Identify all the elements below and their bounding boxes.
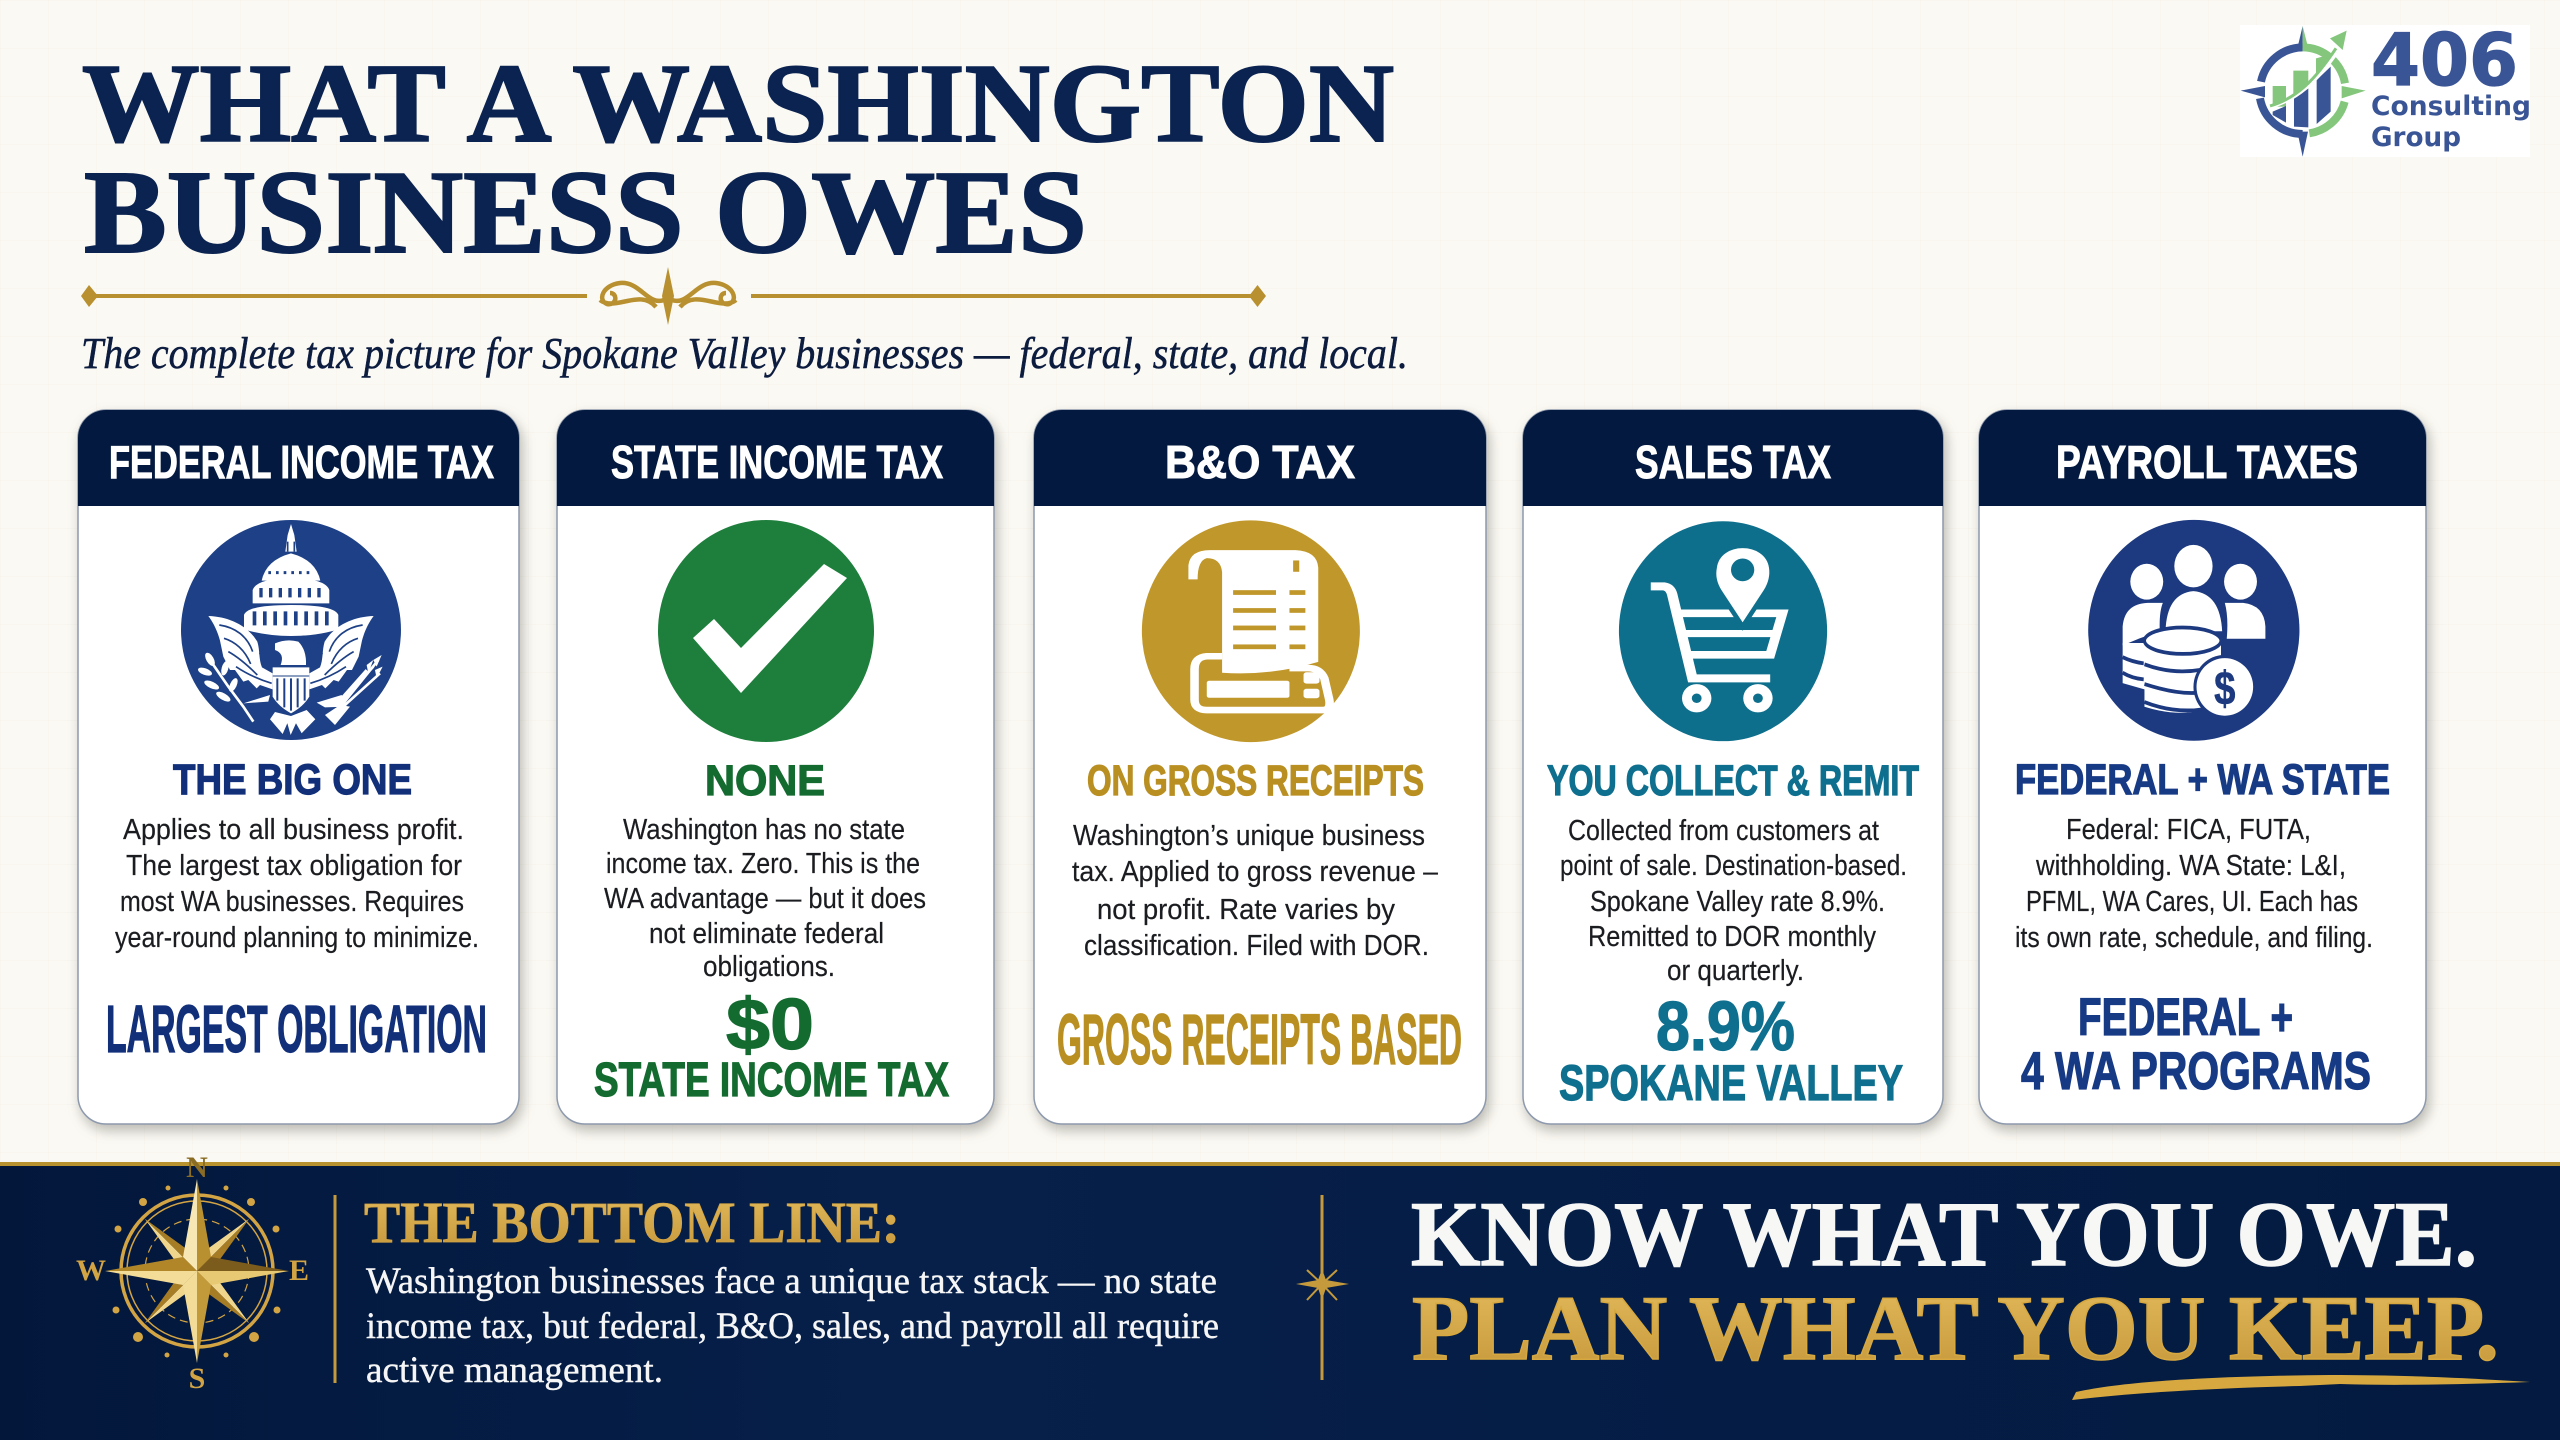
text block: bottom line summary	[366, 1261, 1219, 1391]
panel: sales tax	[1523, 410, 1943, 1124]
description: b&o	[1072, 820, 1439, 962]
description: state: not eliminate federal	[649, 918, 884, 950]
description: sales: Collected from customers at	[1568, 815, 1879, 847]
left wing	[208, 616, 273, 689]
logo: 406 Consulting Group: 406	[2371, 18, 2518, 102]
label: you collect & remit: YOU COLLECT & REMIT	[1547, 757, 1919, 805]
icon: capitol and eagle seal	[181, 520, 401, 740]
divider line left	[334, 1195, 336, 1383]
divider line with gold star	[1296, 1195, 1349, 1380]
icon: gold compass rose: N	[186, 1151, 208, 1184]
description: b&o: not profit. Rate varies by	[1097, 894, 1395, 926]
description: payroll: PFML, WA Cares, UI. Each has	[2026, 886, 2358, 918]
title: WHAT A WASHINGTON	[82, 42, 1394, 166]
description: sales: point of sale. Destination-based.	[1560, 850, 1907, 882]
description: state: income tax. Zero. This is the	[606, 848, 920, 880]
text block: bottom line summary: Washington businesses face a unique tax stack — no state	[366, 1261, 1217, 1302]
description: payroll: withholding. WA State: L&I,	[2035, 850, 2346, 882]
icon: receipt printer	[1142, 520, 1360, 742]
callout: largest obligation: LARGEST OBLIGATION	[106, 992, 487, 1067]
callout: $0 state income tax	[594, 985, 949, 1107]
title	[82, 42, 1394, 278]
description: payroll: its own rate, schedule, and filing.	[2015, 922, 2373, 954]
description: federal: The largest tax obligation for	[126, 850, 462, 882]
icon: gold compass rose	[76, 1151, 309, 1395]
gold brush underline	[2072, 1375, 2530, 1400]
callout: 8.9% spokane valley	[1559, 987, 1903, 1111]
subtitle: The complete tax picture for Spokane Valley businesses — federal, state, and local.	[81, 329, 1408, 378]
ornamental divider	[81, 267, 1266, 325]
description: federal	[115, 814, 479, 954]
title: BUSINESS OWES	[84, 146, 1087, 278]
slogan	[1411, 1183, 2499, 1379]
description: b&o: tax. Applied to gross revenue –	[1072, 856, 1439, 888]
text: GROSS RECEIPTS BASED	[1057, 1001, 1462, 1080]
callout: federal + 4 wa programs	[2021, 988, 2371, 1101]
description: federal: most WA businesses. Requires	[120, 886, 464, 918]
description: federal: Applies to all business profit.	[123, 814, 464, 846]
text block: bottom line summary: active management.	[366, 1350, 663, 1391]
description: sales: Spokane Valley rate 8.9%.	[1590, 886, 1885, 918]
description: sales	[1560, 815, 1907, 987]
header: b&o tax	[1034, 410, 1486, 506]
description: sales: or quarterly.	[1667, 955, 1804, 987]
slogan: PLAN WHAT YOU KEEP.	[1412, 1277, 2499, 1379]
label: on gross receipts: ON GROSS RECEIPTS	[1087, 757, 1424, 805]
logo: 406 Consulting Group	[2240, 18, 2531, 157]
callout: 8.9% spokane valley: 8.9%	[1656, 987, 1795, 1065]
callout: $0 state income tax: STATE INCOME TAX	[594, 1054, 949, 1107]
callout: 8.9% spokane valley: SPOKANE VALLEY	[1559, 1055, 1903, 1111]
description: payroll: Federal: FICA, FUTA,	[2066, 814, 2311, 846]
icon: green check mark	[658, 520, 874, 742]
panel: state income tax	[557, 410, 994, 1124]
description: sales: Remitted to DOR monthly	[1588, 921, 1876, 953]
header: sales tax	[1523, 410, 1943, 506]
arrows bundle	[317, 655, 383, 725]
description: state: obligations.	[703, 951, 835, 983]
icon: shopping cart with location pin	[1619, 521, 1827, 741]
heading: the bottom line: THE BOTTOM LINE:	[364, 1190, 900, 1255]
icon: employees and coins	[2088, 520, 2299, 741]
bottom band	[0, 1151, 2560, 1440]
callout: $0 state income tax: $0	[726, 985, 814, 1065]
panel: b&o tax	[1034, 410, 1486, 1124]
callout: federal + 4 wa programs: 4 WA PROGRAMS	[2021, 1042, 2371, 1101]
icon: gold compass rose: E	[289, 1254, 309, 1287]
description: b&o: classification. Filed with DOR.	[1084, 930, 1429, 962]
header: state income tax	[557, 410, 994, 506]
description: b&o: Washington’s unique business	[1073, 820, 1425, 852]
logo: 406 Consulting Group: Consulting	[2371, 91, 2531, 122]
label: none: NONE	[705, 757, 825, 805]
right wing	[309, 616, 374, 689]
label: federal + wa state: FEDERAL + WA STATE	[2015, 756, 2390, 804]
label: the big one: THE BIG ONE	[173, 756, 412, 804]
header: payroll taxes: PAYROLL TAXES	[2056, 436, 2358, 488]
header: federal income tax: FEDERAL INCOME TAX	[109, 436, 494, 488]
header: b&o tax: B&O TAX	[1165, 436, 1355, 488]
text block: bottom line summary: income tax, but federal, B&O, sales, and payroll all require	[366, 1306, 1219, 1347]
icon: gold compass rose: W	[76, 1254, 106, 1287]
description: payroll	[2015, 814, 2373, 954]
description: state: Washington has no state	[623, 814, 905, 846]
header: state income tax: STATE INCOME TAX	[611, 436, 943, 488]
icon: gold compass rose: S	[189, 1362, 205, 1395]
header: payroll taxes	[1979, 410, 2426, 506]
callout: federal + 4 wa programs: FEDERAL +	[2078, 988, 2293, 1047]
description: state: WA advantage — but it does	[604, 883, 926, 915]
icon: employees and coins: $	[2214, 663, 2236, 715]
logo: 406 Consulting Group: Group	[2371, 122, 2461, 153]
description: federal: year-round planning to minimize.	[115, 922, 479, 954]
description: state	[604, 814, 926, 983]
panel: federal income tax	[78, 410, 519, 1124]
slogan: KNOW WHAT YOU OWE.	[1411, 1183, 2477, 1285]
header: federal income tax	[78, 410, 519, 506]
panel: payroll taxes	[1979, 410, 2426, 1124]
olive branch	[197, 651, 270, 722]
header: sales tax: SALES TAX	[1635, 436, 1831, 488]
icon: compass chart logo mark	[2241, 26, 2366, 157]
